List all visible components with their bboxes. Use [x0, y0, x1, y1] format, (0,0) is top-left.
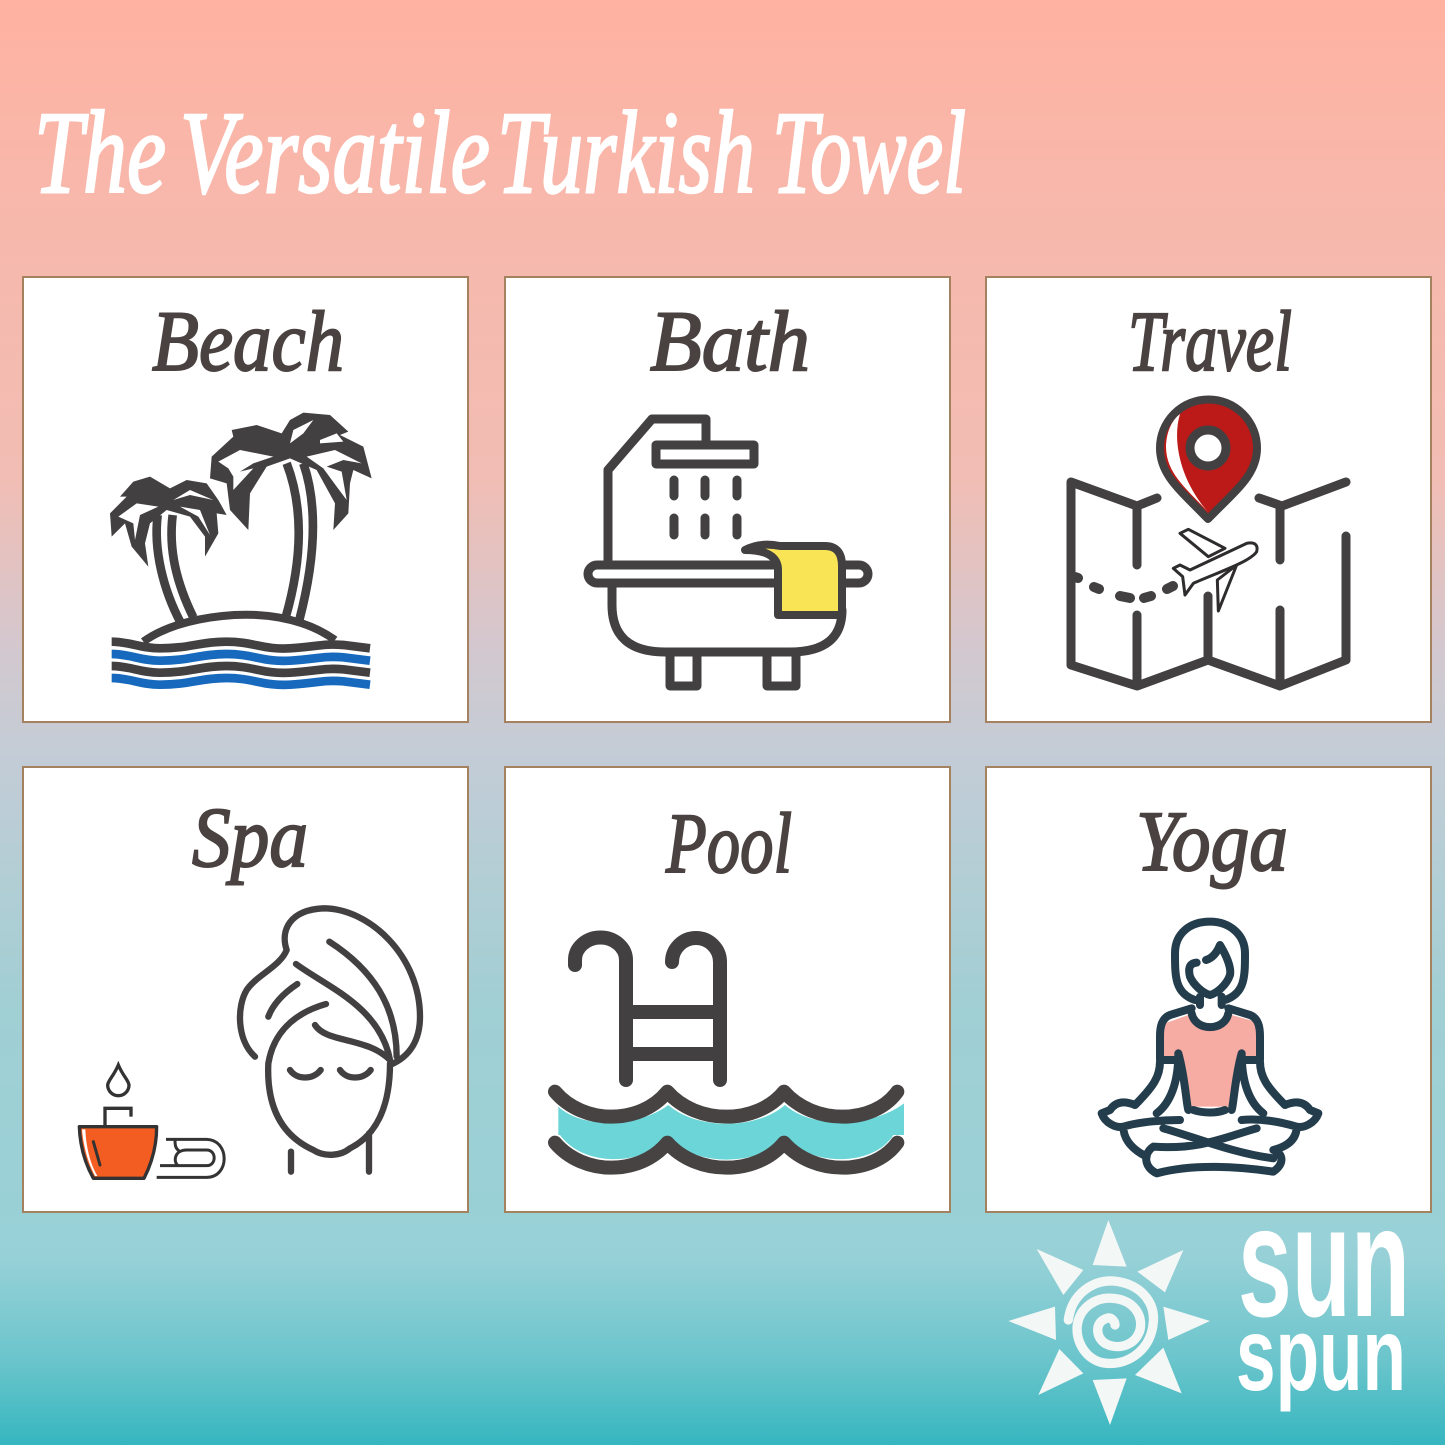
map pin [1160, 399, 1257, 519]
sun emblem [1008, 1220, 1210, 1425]
icon: woman with towel and candle [79, 908, 420, 1178]
icon: meditating woman [1102, 922, 1318, 1173]
title: The [34, 87, 166, 218]
heading: beach: Beach [152, 293, 344, 389]
icon: map with pin and plane [1071, 399, 1346, 686]
panel: beach [23, 277, 468, 722]
plane [1173, 529, 1257, 611]
heading: pool: Pool [665, 795, 792, 891]
title [34, 87, 966, 218]
towel [745, 545, 842, 615]
panel: travel [986, 277, 1431, 722]
rolled towel [157, 1139, 224, 1177]
heading: travel: Travel [1128, 293, 1292, 389]
heading: spa: Spa [192, 789, 308, 885]
logo: sun spun [1008, 1174, 1410, 1425]
title: Versatile [180, 87, 490, 218]
panel: spa [23, 767, 468, 1212]
title: Turkish [497, 87, 755, 218]
heading: bath: Bath [650, 293, 810, 389]
candle [79, 1127, 157, 1178]
icon: bathtub with shower [588, 419, 868, 686]
panel: bath [505, 277, 950, 722]
panel: pool [505, 767, 950, 1212]
icon: pool ladder and waves [555, 938, 904, 1168]
icon: palm island [110, 413, 372, 685]
panel: yoga [986, 767, 1431, 1212]
title: Towel [772, 87, 966, 218]
heading: yoga: Yoga [1136, 793, 1288, 889]
